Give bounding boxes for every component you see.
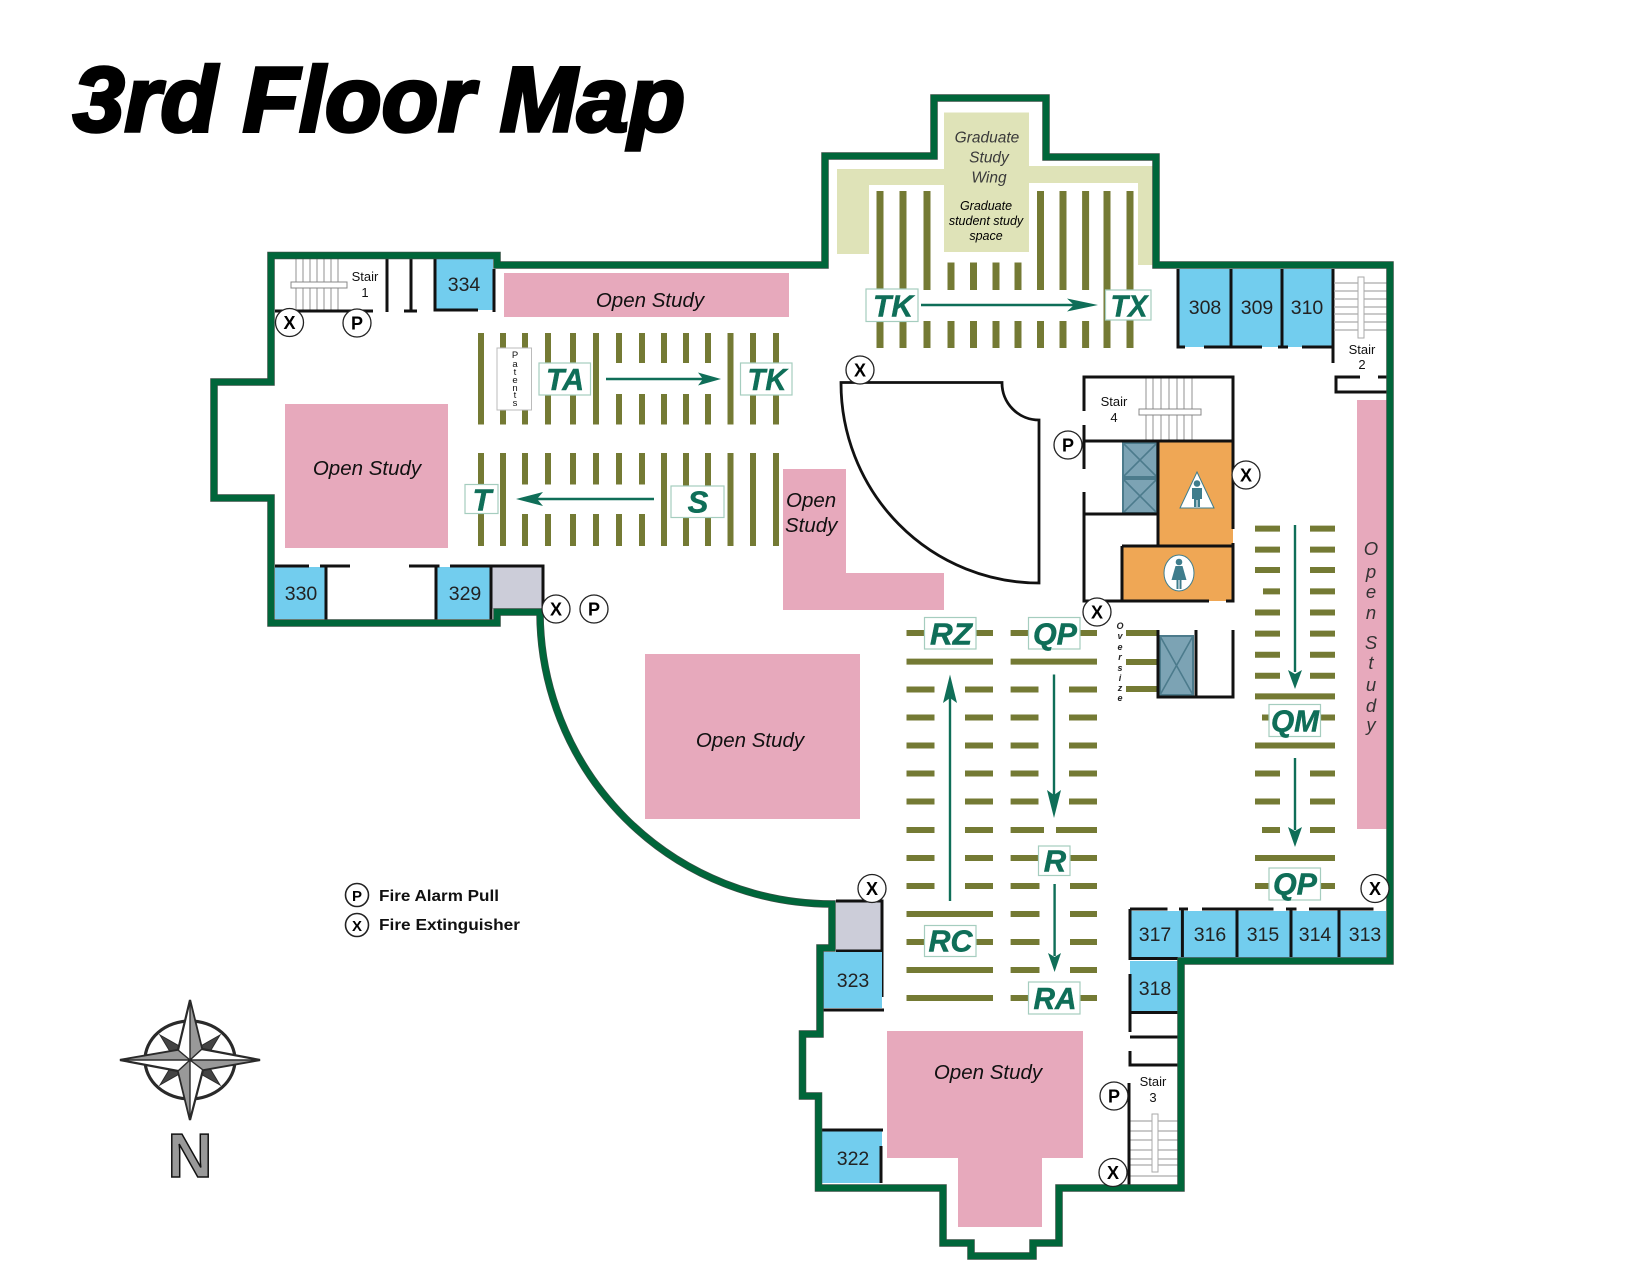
open study right vertical: [1357, 400, 1387, 829]
room 323: [823, 952, 884, 1010]
stacks: QP to RA: [1011, 616, 1097, 1016]
rooms: 313 to 317: [1130, 909, 1386, 958]
rooms: 334: [435, 259, 494, 312]
X marker: [542, 595, 570, 623]
label T: T: [473, 482, 495, 518]
core walls: [1084, 377, 1233, 601]
stair 1: [275, 259, 417, 312]
patents label: [497, 348, 532, 410]
P marker: [1054, 431, 1082, 459]
label oversize: s: [1117, 663, 1123, 673]
stair 4 steps: [1139, 377, 1201, 441]
open study bottom: Open Study: [934, 1061, 1044, 1084]
stacks: oversize: [1116, 621, 1157, 703]
X marker: X: [1091, 602, 1103, 622]
open study right vertical: O: [1364, 538, 1378, 559]
X marker: [1083, 598, 1111, 626]
label oversize: i: [1119, 673, 1122, 683]
heading: graduate study wing: Study: [969, 150, 1010, 166]
label QP upper: QP: [1033, 616, 1077, 652]
text: graduate student study space: space: [969, 229, 1003, 243]
label TA: TA: [546, 362, 584, 397]
legend: fire extinguisher: Fire Extinguisher: [379, 917, 520, 934]
stacks: TK to TX: [866, 191, 1151, 348]
stacks: S to T: [465, 453, 776, 546]
rooms: 330: [275, 567, 325, 619]
room 313: 313: [1349, 924, 1381, 946]
label S: [671, 484, 724, 520]
open study left: [285, 404, 448, 548]
room 315: 315: [1247, 924, 1279, 946]
X marker: [1232, 461, 1260, 489]
arrow TK to TX: [921, 298, 1098, 312]
room 316: 316: [1194, 924, 1226, 946]
women's restroom: [1123, 547, 1233, 601]
open study L-shaped: [783, 469, 944, 610]
X marker: X: [1240, 466, 1252, 486]
heading: graduate study wing: Wing: [971, 170, 1007, 186]
X marker: X: [854, 360, 866, 380]
P marker: [1100, 1082, 1128, 1110]
X marker: [1361, 874, 1389, 902]
X marker: X: [1107, 1163, 1119, 1183]
open study top: [504, 273, 789, 317]
label TX: TX: [1110, 288, 1150, 324]
fire markers: [276, 308, 1389, 1186]
label RZ: RZ: [930, 616, 973, 652]
stacks: TA to TK: [481, 333, 792, 424]
open study left: Open Study: [313, 457, 423, 480]
legend: fire extinguisher: [346, 914, 520, 936]
X marker: [858, 874, 886, 902]
patents label: e: [512, 375, 518, 386]
curved atrium room: [841, 382, 1039, 583]
open study right vertical: S: [1365, 632, 1378, 653]
label QP lower: QP: [1273, 866, 1317, 902]
label oversize: r: [1118, 652, 1122, 662]
label TK: TK: [748, 362, 789, 397]
arrow to QM: [1288, 525, 1302, 689]
X marker: [1099, 1158, 1127, 1186]
P marker: [343, 309, 371, 337]
stair 3: Stair: [1140, 1074, 1167, 1089]
label S: S: [688, 484, 709, 520]
label oversize: z: [1117, 683, 1123, 693]
arrow TA to TK: [606, 372, 721, 386]
heading: graduate study wing: Graduate: [955, 130, 1020, 146]
open study L-shaped: Study: [785, 514, 839, 537]
storage room: grey south: [836, 901, 882, 997]
stacks: QM to QP: [1255, 525, 1335, 902]
rooms: 330: 330: [285, 583, 317, 605]
room 310: 310: [1291, 297, 1323, 319]
P marker: P: [588, 600, 600, 620]
north label: N: [168, 1122, 212, 1191]
open study centre: [645, 654, 860, 819]
title: 3rd Floor Map: [73, 49, 685, 151]
open study top: Open Study: [596, 289, 706, 312]
men's restroom: [1158, 442, 1233, 546]
room 318 and closets: [1130, 961, 1178, 1065]
patents label: s: [513, 398, 518, 409]
P marker: [580, 595, 608, 623]
rooms: 334: 334: [448, 274, 480, 296]
icon: men's restroom: [1180, 472, 1214, 508]
room 318 and closets: 318: [1139, 978, 1171, 1000]
P marker: P: [351, 314, 363, 334]
X marker: X: [550, 600, 562, 620]
stacks: RZ to RC: [906, 616, 993, 998]
X marker: X: [283, 313, 296, 333]
stair 2: Stair: [1349, 342, 1376, 357]
open study right vertical: t: [1368, 652, 1374, 673]
elevator 3: [1158, 630, 1233, 697]
legend: fire alarm pull: P: [352, 888, 362, 905]
text: graduate student study space: student study: [949, 214, 1024, 228]
legend: fire alarm pull: Fire Alarm Pull: [379, 888, 499, 905]
label oversize: e: [1117, 642, 1123, 652]
arrow to QP: [1288, 758, 1302, 847]
patents label: P: [512, 350, 518, 361]
icon: women's restroom: [1164, 555, 1194, 591]
arrow R to RA: [1048, 884, 1061, 972]
exterior wall: [214, 98, 1390, 1256]
room 322: [822, 1130, 883, 1183]
room 308: 308: [1189, 297, 1221, 319]
label QM: QM: [1271, 704, 1320, 738]
stair 3: [1129, 1074, 1178, 1186]
panel: graduate study wing: [837, 112, 1153, 265]
label oversize: e: [1117, 693, 1123, 703]
panel: open study areas: [285, 273, 1387, 1227]
label T: [465, 482, 498, 518]
legend: fire extinguisher: X: [352, 918, 362, 935]
room 314: 314: [1299, 924, 1331, 946]
open study right vertical: u: [1366, 674, 1376, 695]
label oversize: O: [1116, 621, 1124, 631]
stair 2: 2: [1358, 357, 1366, 372]
open study centre: Open Study: [696, 729, 806, 752]
label TK upper: TK: [873, 288, 916, 324]
stair 4 label: 4: [1110, 410, 1118, 425]
open study right vertical: d: [1366, 695, 1377, 716]
open study right vertical: y: [1364, 714, 1377, 735]
open study L-shaped: Open: [786, 489, 836, 512]
label R: R: [1044, 844, 1067, 878]
rooms: 308 309 310: [1178, 269, 1333, 363]
text: graduate student study space: Graduate: [960, 199, 1012, 213]
patents label: t: [514, 367, 517, 378]
arrow RC to RZ: [943, 674, 957, 901]
patents label: a: [512, 359, 518, 370]
open study right vertical: n: [1366, 602, 1376, 623]
stair 4 label: Stair: [1101, 394, 1128, 409]
label RC: RC: [928, 924, 973, 958]
open study right vertical: p: [1365, 561, 1376, 582]
panel: stair 4, elevators and restrooms core: [1084, 377, 1233, 601]
room 323: 323: [837, 970, 869, 992]
X marker: X: [866, 879, 878, 899]
stair 1: 1: [361, 285, 369, 300]
legend: [346, 884, 520, 936]
patents label: t: [514, 390, 517, 401]
label RA: RA: [1034, 981, 1076, 1016]
elevators: [1123, 443, 1157, 513]
stair 2: [1334, 277, 1387, 392]
arrow S to T: [516, 492, 654, 506]
icon: compass rose: [120, 1000, 260, 1120]
rooms: 329: [436, 567, 490, 619]
patents label: n: [512, 383, 518, 394]
X marker: [846, 356, 874, 384]
room 322: 322: [837, 1148, 869, 1170]
P marker: P: [1108, 1086, 1120, 1106]
legend: fire alarm pull: [346, 884, 499, 906]
stair 3: 3: [1149, 1090, 1157, 1105]
X marker: [276, 308, 304, 336]
X marker: X: [1369, 879, 1381, 899]
room 317: 317: [1139, 924, 1171, 946]
walls: south-west rooms: [275, 566, 543, 620]
room 309: 309: [1241, 297, 1273, 319]
P marker: P: [1062, 436, 1074, 456]
open study bottom: [887, 1031, 1083, 1227]
open study right vertical: e: [1366, 581, 1376, 602]
arrow QP to R: [1047, 674, 1061, 818]
label oversize: v: [1117, 631, 1123, 641]
rooms: 329: 329: [449, 583, 481, 605]
storage room: grey west: [492, 566, 543, 609]
stair 1: Stair: [352, 269, 379, 284]
